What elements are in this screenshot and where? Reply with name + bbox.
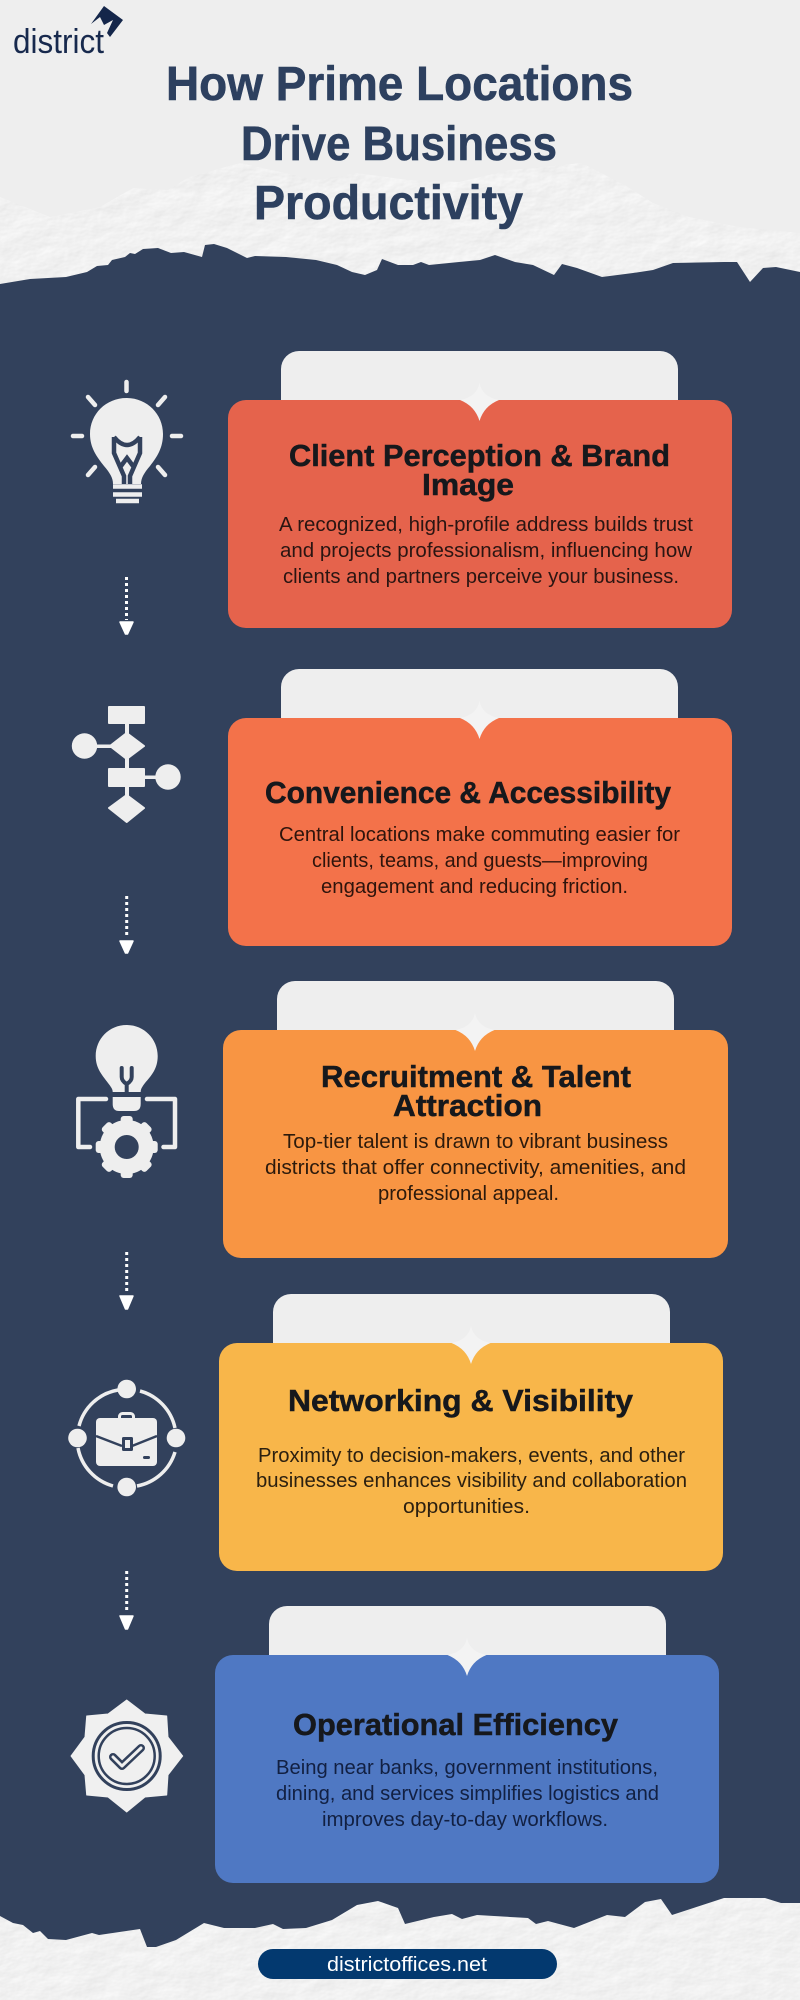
body text [279,514,693,588]
panel: recruitment and talent attraction [223,981,728,1258]
title [166,58,633,230]
body text: districts that offer connectivity, amenities, and [265,1157,686,1179]
title: Drive Business [241,118,557,171]
body text: A recognized, high-profile address builds trust [279,514,693,536]
body text: opportunities. [403,1496,530,1518]
title: Productivity [254,177,523,230]
torn paper strip: top [0,163,800,300]
body text: dining, and services simplifies logistics and [276,1783,659,1805]
icon: briefcase in network ring [68,1380,185,1496]
body text [276,1757,659,1831]
heading: Attraction [393,1088,542,1123]
arrow: dotted down 1 [120,577,133,634]
arrow: dotted down 3 [120,1252,133,1309]
heading: Operational Efficiency [293,1707,619,1742]
heading [289,438,670,502]
icon: flowchart [72,706,181,822]
torn paper strip: bottom [0,1898,800,2000]
body text: improves day-to-day workflows. [322,1809,608,1831]
body text: Top-tier talent is drawn to vibrant business [283,1131,668,1153]
title: How Prime Locations [166,58,633,111]
logo: district: district [13,23,105,61]
website link pill: districtoffices.net [327,1954,487,1976]
body text: Proximity to decision-makers, events, and other [258,1445,685,1467]
body text: Being near banks, government institutions, [276,1757,658,1779]
body text: professional appeal. [378,1183,559,1205]
body text [279,824,680,898]
body text: Central locations make commuting easier for [279,824,680,846]
body text: engagement and reducing friction. [321,876,628,898]
panel: operational efficiency [215,1606,719,1883]
heading [321,1059,631,1123]
panel: client perception and brand image [228,351,732,628]
panel: networking and visibility [219,1294,723,1571]
heading: Convenience & Accessibility [265,775,672,810]
arrow: dotted down 2 [120,896,133,953]
heading: Image [422,467,514,502]
heading: Networking & Visibility [288,1383,634,1418]
body text: clients, teams, and guests—improving [312,850,648,872]
body text: and projects professionalism, influencing how [280,540,693,562]
logo: district [13,6,123,61]
body text: clients and partners perceive your business. [283,566,679,588]
heading: Client Perception & Brand [289,438,670,473]
icon: light bulb with rays [73,382,181,501]
icon: badge with check mark [71,1700,183,1812]
body text [265,1131,686,1205]
icon: light bulb with gear [78,1025,175,1178]
arrow: dotted down 4 [120,1571,133,1629]
panel: convenience and accessibility [228,669,732,946]
body text: businesses enhances visibility and collaboration [256,1470,687,1492]
body text [256,1445,687,1518]
website link pill [258,1949,557,1979]
heading: Recruitment & Talent [321,1059,631,1094]
